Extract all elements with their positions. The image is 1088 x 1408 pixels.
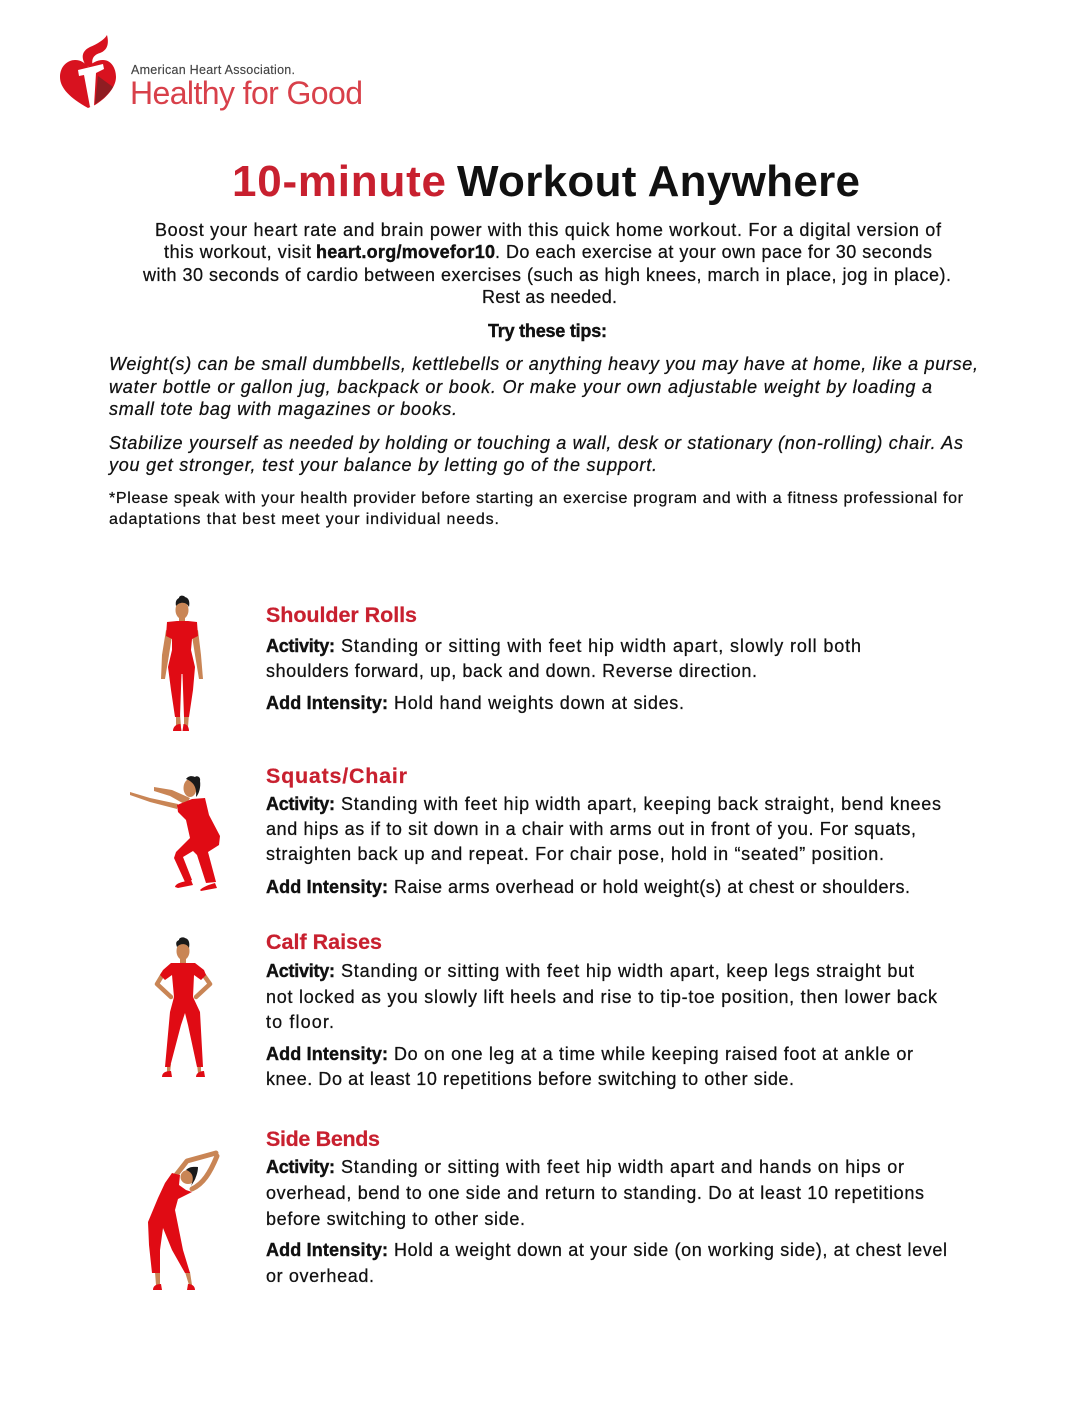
tip: stabilize: Stabilize yourself as needed by holding or touching a wall, desk or stationary (non-rolling) chair. As bbox=[109, 433, 963, 453]
add intensity text: Hold hand weights down at sides. bbox=[394, 693, 684, 713]
activity text: straighten back up and repeat. For chair pose, hold in “seated” position. bbox=[266, 844, 884, 864]
add intensity text: Add Intensity: bbox=[266, 1044, 388, 1064]
intro text block: Rest as needed. bbox=[482, 287, 617, 307]
figure: squat with arms forward bbox=[130, 776, 220, 891]
title: 10-minute bbox=[232, 157, 446, 206]
activity text: Activity: bbox=[266, 961, 335, 981]
activity text: and hips as if to sit down in a chair with arms out in front of you. For squats, bbox=[266, 819, 916, 839]
exercise: calf raises bbox=[157, 930, 938, 1089]
tip: stabilize bbox=[107, 433, 963, 475]
add intensity text bbox=[266, 693, 684, 713]
activity text bbox=[266, 1157, 924, 1229]
activity text bbox=[266, 636, 861, 681]
add intensity text: Add Intensity: bbox=[266, 1240, 388, 1260]
disclaimer note: *Please speak with your health provider before starting an exercise program and with a fitness professional for bbox=[109, 490, 964, 507]
intro text block bbox=[142, 220, 951, 307]
activity text: Standing with feet hip width apart, keeping back straight, bend knees bbox=[341, 794, 941, 814]
heading: Shoulder Rolls bbox=[266, 603, 417, 627]
activity text: Activity: bbox=[266, 1157, 335, 1177]
add intensity text: Raise arms overhead or hold weight(s) at chest or shoulders. bbox=[394, 877, 910, 897]
heading: Side Bends bbox=[266, 1127, 380, 1151]
exercise: side bends bbox=[148, 1127, 947, 1290]
intro text block: with 30 seconds of cardio between exercises (such as high knees, march in place, jog in place). bbox=[142, 265, 951, 285]
tip: weights: water bottle or gallon jug, backpack or book. Or make your own adjustable weight by loading a bbox=[109, 377, 932, 397]
tips heading: Try these tips: bbox=[488, 321, 607, 341]
activity text: before switching to other side. bbox=[266, 1209, 525, 1229]
activity text bbox=[266, 794, 941, 864]
intro text block: this workout, visit bbox=[164, 242, 311, 262]
activity text: shoulders forward, up, back and down. Reverse direction. bbox=[266, 661, 757, 681]
intro text block: Boost your heart rate and brain power with this quick home workout. For a digital version of bbox=[155, 220, 942, 240]
add intensity text: knee. Do at least 10 repetitions before switching to other side. bbox=[266, 1069, 794, 1089]
activity text: Standing or sitting with feet hip width apart and hands on hips or bbox=[341, 1157, 904, 1177]
activity text: not locked as you slowly lift heels and rise to tip-toe position, then lower back bbox=[266, 987, 938, 1007]
tip: weights: small tote bag with magazines or books. bbox=[109, 399, 457, 419]
add intensity text bbox=[266, 1044, 913, 1089]
exercise: shoulder rolls bbox=[161, 596, 861, 731]
tip: weights: Weight(s) can be small dumbbells, kettlebells or anything heavy you may have at home, like a purse, bbox=[109, 354, 978, 374]
logo: American Heart Association Healthy for Good bbox=[60, 35, 363, 111]
add intensity text bbox=[266, 1240, 947, 1286]
heading: Calf Raises bbox=[266, 930, 382, 954]
text: Healthy for Good: Healthy for Good bbox=[130, 75, 363, 111]
text: American Heart Association: American Heart Association. bbox=[131, 63, 295, 77]
disclaimer note bbox=[109, 490, 964, 528]
figure: side bend with arms overhead bbox=[148, 1153, 217, 1290]
activity text: Activity: bbox=[266, 636, 335, 656]
activity text: overhead, bend to one side and return to standing. Do at least 10 repetitions bbox=[266, 1183, 924, 1203]
tip: stabilize: you get stronger, test your balance by letting go of the support. bbox=[107, 455, 657, 475]
activity text: to floor. bbox=[266, 1012, 334, 1032]
icon: heart and torch bbox=[60, 35, 116, 108]
title: Workout Anywhere bbox=[457, 157, 860, 206]
exercise: squats/chair bbox=[130, 764, 941, 897]
activity text: Standing or sitting with feet hip width apart, keep legs straight but bbox=[341, 961, 914, 981]
add intensity text: Add Intensity: bbox=[266, 693, 388, 713]
tip: weights bbox=[109, 354, 978, 419]
figure: standing with arms at sides bbox=[161, 596, 203, 731]
add intensity text: Hold a weight down at your side (on working side), at chest level bbox=[394, 1240, 947, 1260]
activity text: Standing or sitting with feet hip width apart, slowly roll both bbox=[341, 636, 861, 656]
add intensity text: or overhead. bbox=[266, 1266, 374, 1286]
activity text bbox=[266, 961, 938, 1032]
intro text block: . Do each exercise at your own pace for 30 seconds bbox=[495, 242, 932, 262]
add intensity text: Do on one leg at a time while keeping raised foot at ankle or bbox=[394, 1044, 913, 1064]
intro text block: heart.org/movefor10 bbox=[316, 242, 495, 262]
title bbox=[232, 157, 860, 206]
add intensity text: Add Intensity: bbox=[266, 877, 388, 897]
activity text: Activity: bbox=[266, 794, 335, 814]
figure: standing with hands on hips bbox=[157, 937, 210, 1077]
heading: Squats/Chair bbox=[266, 764, 408, 788]
disclaimer note: adaptations that best meet your individual needs. bbox=[109, 511, 499, 528]
